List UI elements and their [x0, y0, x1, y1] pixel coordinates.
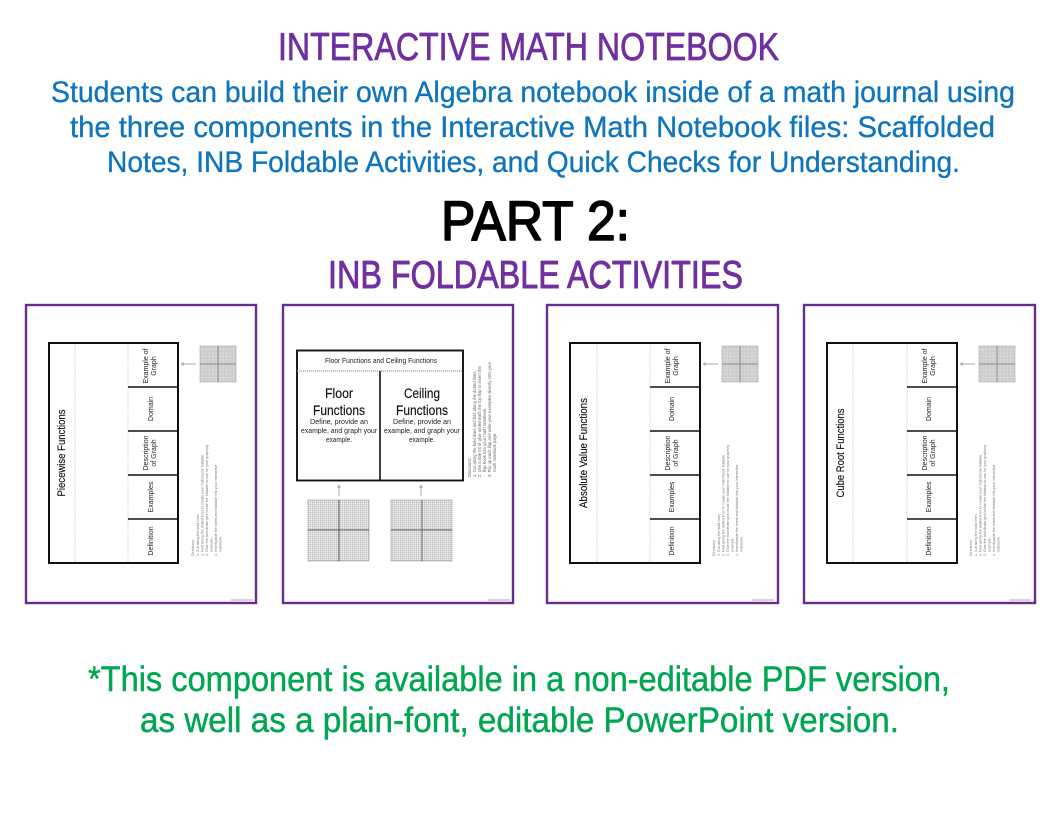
foldable: piecewise functions: of Graph [151, 439, 158, 467]
directions text: 2. Fold along the dotted lines to create your matchbook foldable. [722, 454, 726, 556]
directions text: math notebook page. [492, 433, 497, 472]
foldable: piecewise functions: Graph [151, 356, 158, 376]
directions text: example. [210, 537, 214, 552]
availability note: as well as a plain-font, editable PowerPoint version. [140, 701, 899, 740]
foldable: piecewise functions: Definition [148, 526, 155, 556]
directions text: 1. Cut along the bold lines. [974, 513, 978, 556]
directions text: notebook. [740, 536, 744, 552]
directions text: 1. Cut along the bold lines and fold along the dotted lines. [472, 370, 477, 477]
flap: ceiling: Define, provide an [393, 417, 451, 426]
directions text: 1. Cut along the bold lines. [196, 513, 200, 556]
availability note: *This component is available in a non-editable PDF version, [88, 660, 950, 699]
directions text: example. [988, 537, 992, 552]
intro text: Notes, INB Foldable Activities, and Quick Checks for Understanding. [107, 146, 960, 179]
flap: floor: example. [326, 435, 352, 444]
foldable: absolute value functions: Examples [669, 481, 676, 512]
foldable: cube root functions: Domain [926, 397, 933, 421]
small graph grid [200, 346, 236, 382]
directions text: 2. Fold along the dotted lines to create your matchbook foldable. [978, 454, 982, 556]
directions text: 3. Glue the coordinate grid inside the foldable to use for your graphing [726, 445, 730, 556]
footer credit [488, 599, 510, 601]
foldable: cube root functions: Description [922, 435, 929, 471]
foldable: absolute value functions: of Graph [673, 439, 680, 467]
footer credit [231, 599, 253, 601]
foldable: piecewise functions: Description [143, 435, 150, 471]
panel: piecewise functions [26, 305, 256, 603]
footer credit [752, 599, 774, 601]
flap: ceiling: Ceiling [404, 385, 440, 401]
directions text: Directions: [467, 457, 472, 477]
directions text: notebook. [996, 536, 1000, 552]
footer credit [1009, 599, 1031, 601]
foldable: absolute value functions: Definition [669, 526, 676, 556]
panel: floor and ceiling functions [283, 305, 513, 603]
flap: ceiling: example, and graph your [384, 426, 461, 435]
directions text [467, 361, 497, 477]
arrow [960, 362, 975, 366]
directions text: 4. Insert/paste the sheet and foldable into your interactive [735, 465, 739, 556]
foldable: absolute value functions: Description [665, 435, 672, 471]
foldable: absolute value functions: Graph [673, 356, 680, 376]
intro text [51, 76, 1015, 179]
flap: floor: Functions [313, 402, 365, 418]
flap: floor: Floor [325, 385, 353, 401]
flap: floor: example, and graph your [301, 426, 378, 435]
foldable: absolute value functions [570, 343, 700, 563]
directions text: 2. Use a little bit of glue underneath the top flap to insert the [477, 366, 482, 477]
directions text: Directions: [712, 539, 716, 556]
foldable: piecewise functions: Domain [148, 397, 155, 421]
arrow [181, 362, 196, 366]
directions text [712, 445, 744, 556]
foldable: cube root functions: Example of [922, 348, 929, 384]
flap: ceiling [384, 385, 461, 444]
directions text: Directions: [191, 539, 195, 556]
intro text: the three components in the Interactive Math Notebook files: Scaffolded [70, 111, 995, 144]
arrow [703, 362, 718, 366]
flap: ceiling: Functions [396, 402, 448, 418]
directions text [969, 445, 1000, 556]
directions text: 4. Insert/paste the sheet and foldable into your interactive [214, 465, 218, 556]
small graph grid [722, 346, 758, 382]
flap: floor: Define, provide an [310, 417, 368, 426]
foldable: floor and ceiling [297, 350, 463, 480]
foldable: floor and ceiling: Floor Functions and Ceiling Functions [325, 356, 437, 365]
directions text: 3. Glue the coordinate grid inside the foldable to use for your graphing [983, 445, 987, 556]
subheading: INB foldable activities: INB FOLDABLE ACTIVITIES [328, 254, 743, 297]
panel: absolute value functions [547, 305, 778, 603]
flap: floor [301, 385, 378, 444]
arrows [338, 485, 422, 496]
flap: ceiling: example. [409, 435, 435, 444]
directions text: 4. Insert/paste the sheet and foldable into your interactive [992, 465, 996, 556]
foldable: cube root functions: Cube Root Functions [835, 408, 847, 498]
foldable: absolute value functions: Absolute Value Functions [578, 398, 590, 508]
directions text: 2. Fold along the dotted lines to create your matchbook foldable. [200, 454, 204, 556]
directions text: 3. Glue the coordinate grid inside the foldable to use for your graphing [205, 445, 209, 556]
title: INTERACTIVE MATH NOTEBOOK [278, 26, 779, 69]
panel: cube root functions [804, 305, 1035, 603]
graph grid: ceiling [391, 500, 452, 561]
foldable: cube root functions: Graph [930, 356, 937, 376]
small graph grid [979, 346, 1015, 382]
directions text: example. [730, 537, 734, 552]
availability note [88, 660, 950, 740]
foldable: cube root functions: of Graph [930, 439, 937, 467]
intro text: Students can build their own Algebra notebook inside of a math journal using [51, 76, 1015, 109]
graph grid: floor [308, 500, 369, 561]
foldable: cube root functions [827, 343, 957, 563]
foldable: absolute value functions: Example of [665, 348, 672, 384]
heading: part 2: PART 2: [441, 189, 630, 252]
directions text: Directions: [969, 539, 973, 556]
directions text: flap book into your math notebook. [482, 408, 487, 472]
foldable: piecewise functions: Examples [148, 481, 155, 512]
directions text: notebook. [218, 536, 222, 552]
foldable: piecewise functions: Example of [143, 348, 150, 384]
foldable: cube root functions: Examples [926, 481, 933, 512]
foldable: cube root functions: Definition [926, 526, 933, 556]
foldable: piecewise functions [49, 343, 178, 563]
foldable: piecewise functions: Piecewise Functions [56, 409, 68, 496]
directions text [191, 445, 222, 556]
directions text: 3. Flip up each flap and write your examples directly onto your [487, 361, 492, 477]
foldable: absolute value functions: Domain [669, 397, 676, 421]
directions text: 1. Cut along the bold lines. [717, 513, 721, 556]
